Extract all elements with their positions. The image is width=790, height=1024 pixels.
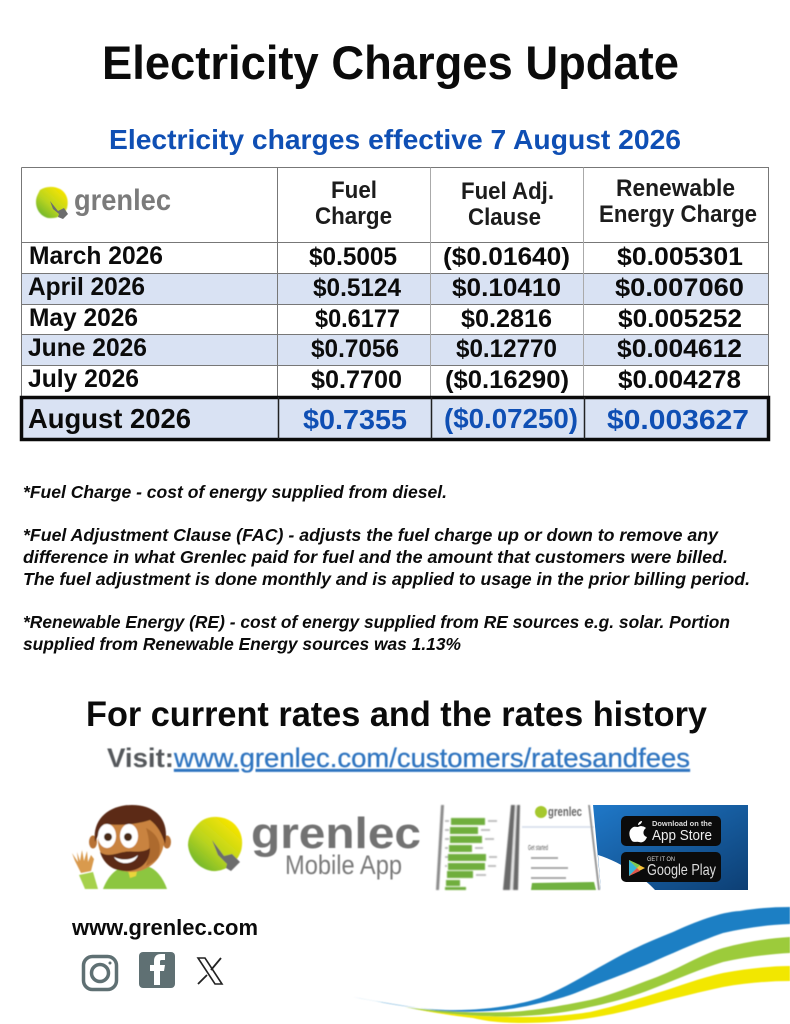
row: April 2026: April 2026 bbox=[28, 273, 145, 301]
badge: app store: App Store bbox=[652, 827, 712, 844]
note: fuel adjustment clause: *Fuel Adjustment Clause (FAC) - adjusts the fuel charge up or down to remove any bbox=[23, 525, 719, 545]
row: July 2026: ($0.16290) bbox=[445, 366, 569, 394]
row: April 2026: $0.5124 bbox=[313, 274, 401, 302]
row: May 2026: May 2026 bbox=[29, 304, 138, 332]
subtitle: Electricity charges effective 7 August 2026 bbox=[109, 124, 681, 155]
phone screenshot: get started bbox=[522, 804, 600, 890]
icon: X bbox=[198, 958, 222, 984]
row: July 2026: $0.004278 bbox=[618, 366, 741, 394]
row: April 2026: $0.007060 bbox=[615, 274, 744, 302]
note: fuel charge: *Fuel Charge - cost of energy supplied from diesel. bbox=[23, 482, 447, 502]
logo: grenlec mobile app: grenlec bbox=[251, 809, 421, 858]
heading: current rates: For current rates and the rates history bbox=[86, 695, 708, 734]
phone screenshot: get started: Get started bbox=[528, 845, 548, 852]
row: March 2026 bbox=[29, 242, 743, 271]
badge: app store: Download on the bbox=[652, 821, 712, 828]
row: June 2026: $0.7056 bbox=[311, 335, 399, 363]
visit link line: www.grenlec.com/customers/ratesandfees bbox=[173, 743, 690, 773]
website address: www.grenlec.com bbox=[71, 915, 258, 940]
row: August 2026 highlighted: $0.7355 bbox=[303, 404, 407, 435]
header: grenlec logo: grenlec bbox=[74, 184, 171, 217]
row: April 2026: $0.10410 bbox=[452, 274, 561, 302]
row: May 2026: $0.2816 bbox=[461, 305, 552, 333]
icon: facebook bbox=[139, 952, 175, 988]
header: renewable energy charge bbox=[599, 175, 757, 228]
panel: store badges bbox=[593, 805, 748, 890]
header: fuel adjustment clause: Clause bbox=[468, 204, 541, 231]
rates table bbox=[22, 168, 768, 440]
note: fuel adjustment clause: difference in what Grenlec paid for fuel and the amount that customers were billed. bbox=[23, 547, 728, 567]
header: renewable energy charge: Energy Charge bbox=[599, 201, 757, 228]
row: August 2026 highlighted: ($0.07250) bbox=[444, 403, 578, 434]
row: May 2026 bbox=[29, 304, 742, 333]
row: July 2026: $0.7700 bbox=[311, 366, 402, 394]
app screenshots and store badges bbox=[436, 804, 748, 890]
badge: google play bbox=[621, 852, 721, 882]
row: May 2026: $0.6177 bbox=[315, 305, 400, 333]
row: March 2026: ($0.01640) bbox=[443, 243, 570, 271]
header: fuel charge bbox=[315, 177, 392, 230]
row: March 2026: $0.5005 bbox=[309, 243, 397, 271]
row: March 2026: March 2026 bbox=[29, 242, 163, 270]
row: August 2026 highlighted: August 2026 bbox=[28, 403, 191, 434]
badge: google play: Google Play bbox=[647, 862, 716, 879]
row: April 2026 bbox=[28, 273, 744, 302]
decorative swoosh: blue green yellow waves bbox=[353, 907, 790, 1023]
row: March 2026: $0.005301 bbox=[617, 243, 743, 271]
row: June 2026: $0.004612 bbox=[617, 335, 742, 363]
badge: app store bbox=[621, 816, 721, 846]
row: July 2026 bbox=[28, 365, 741, 394]
badge: google play: GET IT ON bbox=[647, 857, 675, 863]
header: fuel adjustment clause: Fuel Adj. bbox=[461, 178, 554, 205]
logo: grenlec mobile app: Mobile App bbox=[285, 850, 402, 880]
row: June 2026 bbox=[28, 334, 742, 363]
header: renewable energy charge: Renewable bbox=[616, 175, 735, 202]
header: grenlec logo bbox=[36, 184, 171, 219]
phone screenshot: get started: grenlec bbox=[548, 804, 582, 819]
note: renewable energy bbox=[23, 612, 730, 654]
header: fuel adjustment clause bbox=[461, 178, 554, 231]
note: renewable energy: supplied from Renewable Energy sources was 1.13% bbox=[23, 634, 461, 654]
note: renewable energy: *Renewable Energy (RE) - cost of energy supplied from RE sources e.g. solar. Portion bbox=[23, 612, 730, 632]
icon: instagram bbox=[84, 956, 116, 990]
header: fuel charge: Fuel bbox=[331, 177, 377, 204]
row: August 2026 highlighted: $0.003627 bbox=[607, 404, 749, 435]
row: August 2026 highlighted bbox=[22, 397, 768, 440]
icon: waving mascot bbox=[72, 805, 171, 889]
note: fuel adjustment clause: The fuel adjustment is done monthly and is applied to usage in the prior billing period. bbox=[23, 569, 750, 589]
logo: grenlec mobile app bbox=[188, 809, 421, 880]
row: May 2026: $0.005252 bbox=[618, 305, 742, 333]
header: fuel charge: Charge bbox=[315, 203, 392, 230]
row: June 2026: $0.12770 bbox=[456, 335, 557, 363]
row: June 2026: June 2026 bbox=[28, 334, 147, 362]
row: July 2026: July 2026 bbox=[28, 365, 139, 393]
note: fuel adjustment clause bbox=[23, 525, 750, 589]
phone screenshot: usage bars bbox=[436, 805, 520, 890]
visit link line: Visit: bbox=[107, 743, 174, 773]
title: Electricity Charges Update bbox=[102, 36, 679, 89]
